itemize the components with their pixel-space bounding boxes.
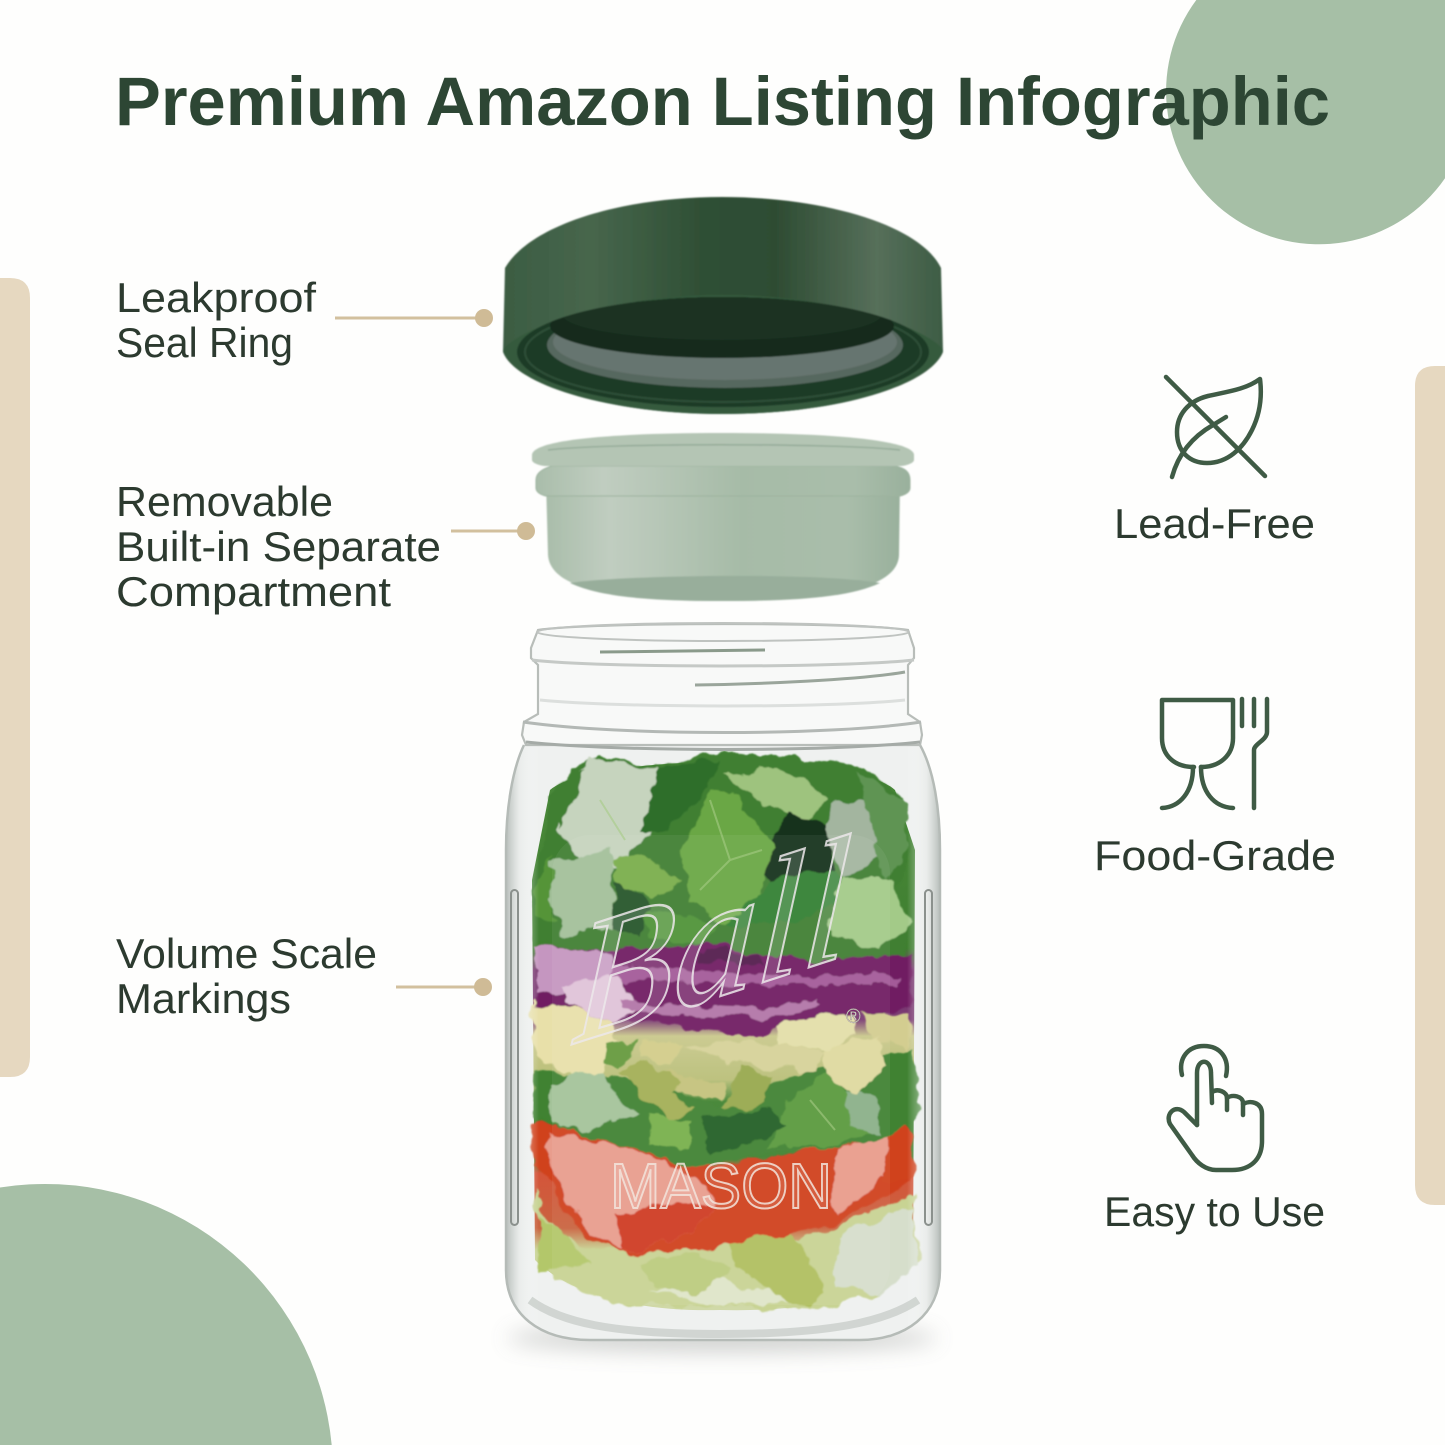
label: Food-Grade — [1094, 832, 1336, 879]
embossed registered mark: ® — [846, 1006, 861, 1028]
leader dot — [474, 978, 492, 996]
salad underlay — [532, 762, 915, 1310]
callout text: Built-in Separate — [116, 523, 441, 570]
callout text: Volume Scale — [116, 930, 377, 977]
feature: easy to use — [1104, 1046, 1325, 1235]
callout text: Markings — [116, 975, 291, 1022]
lid lower rim — [503, 295, 943, 414]
tomato layer — [530, 1125, 912, 1255]
cream cubes — [533, 995, 620, 1075]
jar outline — [506, 745, 940, 1340]
leader dot — [475, 309, 493, 327]
product: glass jar with salad — [504, 623, 942, 1345]
title: Premium Amazon Listing Infographic — [115, 63, 1330, 140]
compartment lower ring — [536, 466, 910, 496]
jar shadow — [507, 1324, 937, 1352]
jar base glass — [530, 1300, 918, 1334]
compartment rim — [532, 433, 914, 466]
callout: volume scale markings — [116, 930, 492, 1022]
glass edge shading — [507, 764, 939, 1308]
callout text: Removable — [116, 478, 333, 525]
callout text: Compartment — [116, 568, 391, 615]
feature: lead-free — [1114, 377, 1315, 547]
decorative circle: bottom left — [0, 1184, 332, 1445]
avocado — [620, 1058, 695, 1120]
leader line — [335, 316, 484, 320]
central glass panel — [552, 835, 890, 1305]
embossed mason text: MASON — [610, 1150, 832, 1222]
label: Easy to Use — [1104, 1188, 1325, 1235]
callout text: Seal Ring — [116, 319, 293, 366]
leaf veins — [600, 800, 835, 1130]
icon: pointing hand — [1169, 1046, 1262, 1170]
salad layers — [504, 745, 942, 1345]
product: lid — [503, 197, 943, 415]
side bar: left — [0, 278, 30, 1077]
icon: crossed leaf — [1166, 377, 1265, 477]
compartment base shade — [570, 576, 880, 601]
jar body — [506, 745, 940, 1340]
decorative circle: top right — [1166, 0, 1445, 244]
lower green lettuce — [533, 1050, 918, 1170]
red onion — [535, 935, 912, 1035]
product: compartment — [532, 433, 914, 601]
callout: leakproof seal ring — [116, 274, 493, 366]
leader line — [396, 986, 483, 988]
embossed side bar right — [925, 890, 932, 1225]
embossed script logo: Ball — [567, 798, 857, 1084]
leader dot — [517, 522, 535, 540]
jar neck — [522, 623, 922, 750]
side bar: right — [1415, 366, 1445, 1205]
callout text: Leakproof — [116, 274, 316, 321]
lid opening — [516, 296, 930, 408]
label: Lead-Free — [1114, 500, 1315, 547]
lid outer shell — [503, 197, 943, 414]
callout: removable compartment — [116, 478, 535, 615]
feature: food-grade — [1094, 699, 1336, 879]
embossed side bar left — [511, 890, 518, 1225]
compartment body — [546, 480, 900, 601]
icon: glass and fork — [1162, 699, 1267, 808]
leader line — [451, 530, 526, 532]
top lettuce mass — [532, 752, 912, 960]
bottom pale lettuce — [532, 1190, 918, 1310]
